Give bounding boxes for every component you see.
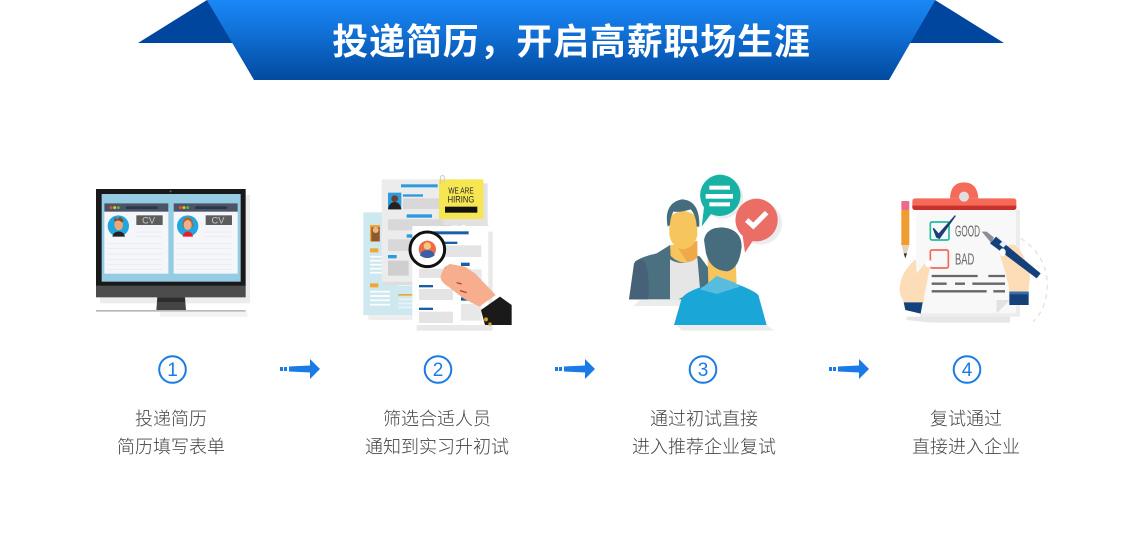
icon: checklist clipboard with hands and pen: BAD xyxy=(955,251,974,268)
step 1: submit resume xyxy=(96,189,250,429)
arrow 1 xyxy=(280,359,320,379)
step number 2: 2 xyxy=(433,360,443,381)
step number 3 xyxy=(690,356,716,383)
icon: monitor showing two CVs xyxy=(96,189,250,317)
icon: monitor showing two CVs: CV xyxy=(212,215,225,225)
icon: checklist clipboard with hands and pen: GOOD xyxy=(955,223,980,240)
step 1 text: 投递简历 xyxy=(135,409,207,429)
icon: resumes, hiring note and magnifier: HIRING xyxy=(448,194,474,204)
arrow 2 xyxy=(555,359,595,379)
icon: checklist clipboard with hands and pen xyxy=(900,182,1047,323)
step 3: interview xyxy=(629,175,782,429)
icon: two people talking with speech bubbles xyxy=(629,175,782,331)
step 2 second line: 通知到实习升初试 xyxy=(365,437,509,457)
arrow 3 xyxy=(829,359,869,379)
step 4 second line: 直接进入企业 xyxy=(912,437,1020,457)
step number 4: 4 xyxy=(962,360,973,381)
step 1 second line: 简历填写表单 xyxy=(117,437,225,457)
step number 1 xyxy=(159,356,186,383)
step number 1: 1 xyxy=(167,360,178,381)
step number 2 xyxy=(425,356,451,383)
step number 3: 3 xyxy=(698,360,708,381)
title: 投递简历，开启高薪职场生涯 xyxy=(332,21,811,62)
step 4 text: 复试通过 xyxy=(930,409,1002,429)
icon: monitor showing two CVs: CV xyxy=(142,215,156,225)
step 4: final interview xyxy=(900,182,1047,429)
icon: resumes, hiring note and magnifier: WE ARE xyxy=(448,186,474,195)
icon: resumes, hiring note and magnifier xyxy=(363,175,512,331)
banner ribbon with title xyxy=(138,0,1004,80)
step 2 text: 筛选合适人员 xyxy=(383,409,491,429)
step number 4 xyxy=(954,356,980,383)
step 2: screening xyxy=(363,175,512,429)
step 3 text: 通过初试直接 xyxy=(650,409,758,429)
step 3 second line: 进入推荐企业复试 xyxy=(632,437,776,457)
